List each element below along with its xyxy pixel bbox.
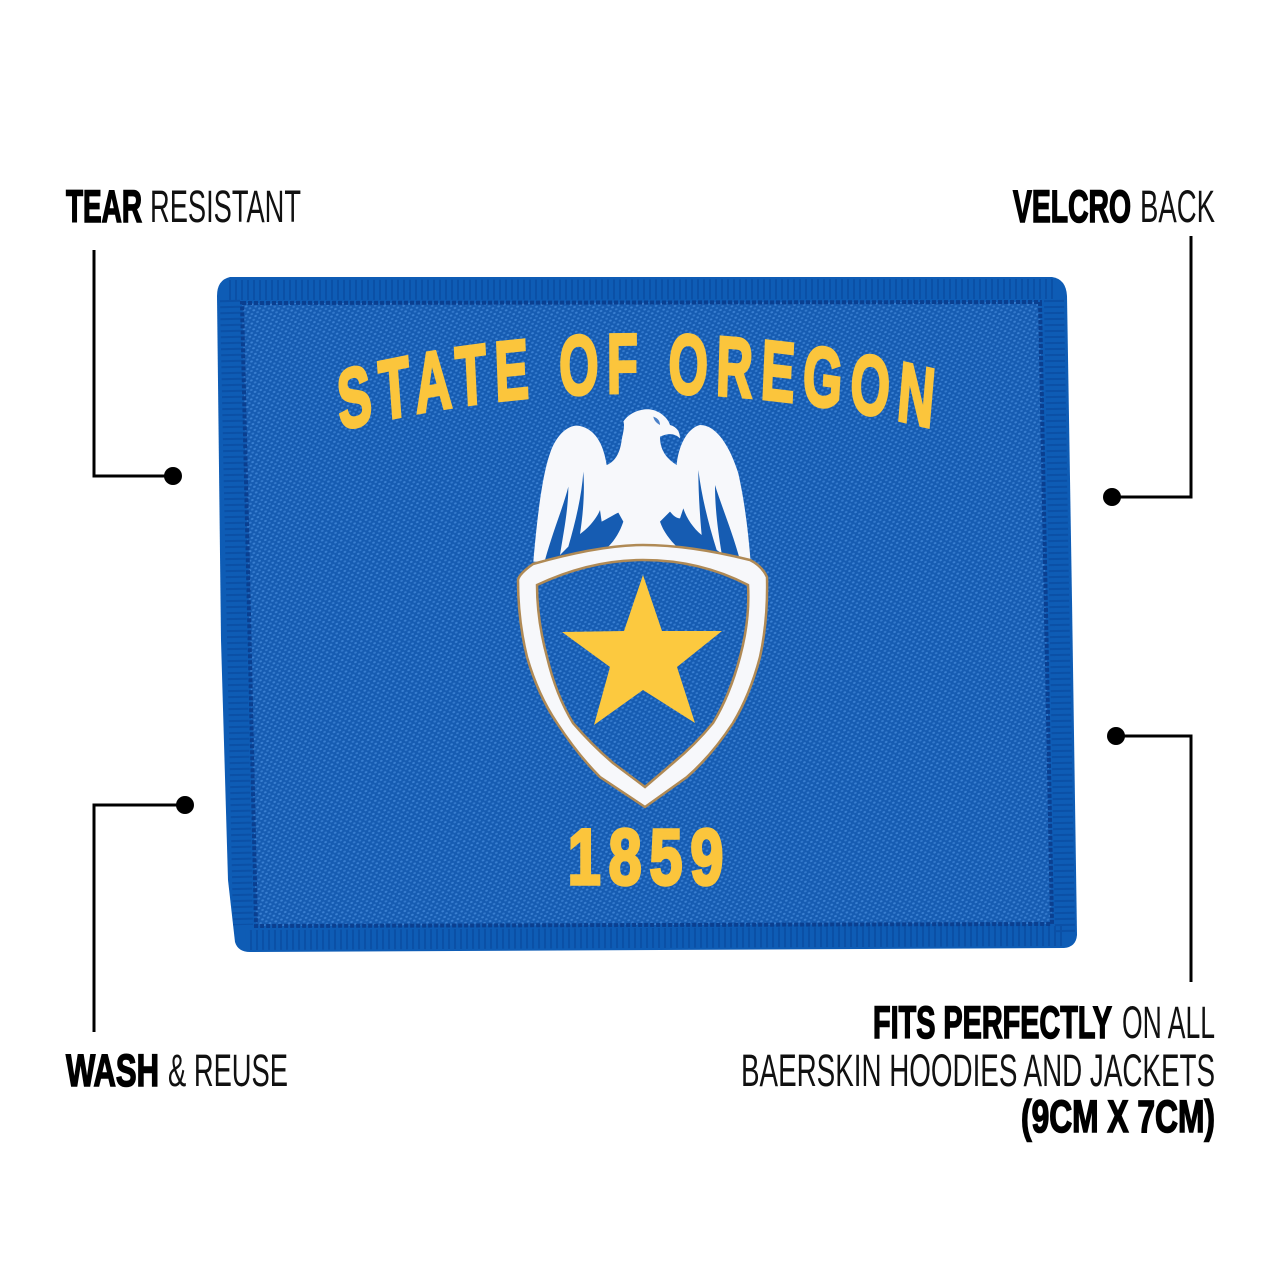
year: 1859 — [568, 813, 731, 901]
callout: tear resistant: RESISTANT — [150, 181, 301, 232]
callout: wash and reuse — [66, 796, 288, 1096]
eagle — [533, 409, 751, 563]
callout: velcro back: BACK — [1140, 181, 1215, 232]
patch fabric field — [242, 302, 1052, 926]
callout: fits perfectly — [741, 727, 1215, 1142]
patch — [217, 277, 1077, 952]
shield emblem — [518, 545, 767, 807]
callout: tear resistant: TEAR — [66, 181, 142, 232]
callout: fits perfectly: FITS PERFECTLY — [873, 997, 1112, 1048]
callout: wash and reuse: & REUSE — [168, 1045, 288, 1096]
callout: tear resistant — [66, 181, 301, 485]
eagle eye — [653, 417, 660, 425]
callout: velcro back — [1013, 181, 1215, 506]
callout: wash and reuse: WASH — [66, 1045, 159, 1096]
callout: velcro back: VELCRO — [1013, 181, 1131, 232]
icon: star — [562, 575, 722, 725]
callout: fits perfectly: ON ALL — [1122, 997, 1215, 1048]
patch border — [217, 277, 1077, 952]
arched title: STATE OF OREGON — [338, 332, 935, 429]
